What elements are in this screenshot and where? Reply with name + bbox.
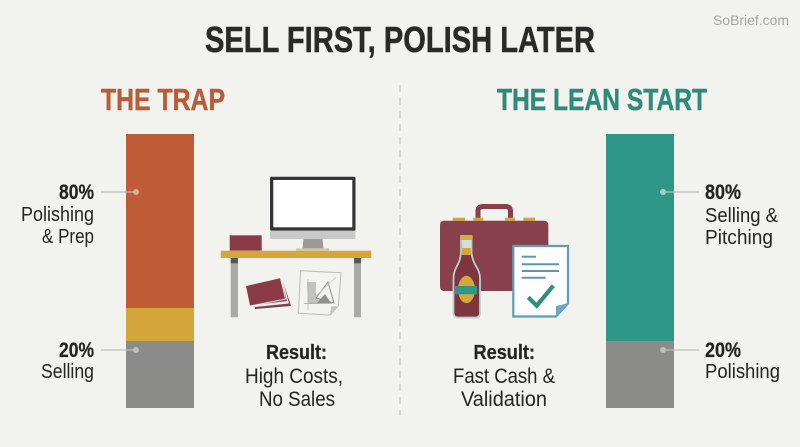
panel: the trap: [21, 82, 371, 411]
result: fast cash and validation: [453, 342, 555, 411]
watermark: SoBrief.com: [713, 12, 789, 28]
callout: 80% polishing and prep: & Prep: [42, 226, 94, 248]
callout: 80% selling and pitching: Selling &: [705, 205, 779, 227]
callout: 20% selling: [41, 339, 139, 383]
callout: 80% polishing and prep: [21, 181, 139, 248]
result: high costs, no sales: [245, 342, 343, 411]
callout: 80% polishing and prep: Polishing: [21, 204, 94, 226]
result: high costs, no sales: No Sales: [259, 388, 335, 411]
heading: the trap: THE TRAP: [101, 82, 225, 117]
heading: the lean start: THE LEAN START: [497, 82, 707, 117]
callout: 80% selling and pitching: Pitching: [705, 227, 773, 249]
result: high costs, no sales: High Costs,: [245, 365, 343, 388]
panel: the lean start: [440, 82, 780, 411]
result: fast cash and validation: Result:: [474, 342, 535, 364]
callout: 80% selling and pitching: [660, 181, 779, 249]
result: fast cash and validation: Validation: [461, 388, 547, 411]
callout: 20% selling: 20%: [59, 339, 94, 362]
stacked bar: lean time split: [606, 134, 674, 408]
callout: 20% selling: Selling: [41, 361, 94, 383]
callout: 20% polishing: 20%: [705, 339, 741, 362]
icon: desk with monitor and papers: [221, 177, 371, 317]
callout: 20% polishing: Polishing: [705, 361, 780, 383]
result: fast cash and validation: Fast Cash &: [453, 365, 555, 388]
callout: 80% selling and pitching: 80%: [705, 181, 741, 204]
result: high costs, no sales: Result:: [266, 342, 327, 364]
stacked bar: trap time split: [126, 134, 194, 408]
callout: 20% polishing: [660, 339, 780, 383]
callout: 80% polishing and prep: 80%: [59, 181, 94, 204]
icon: briefcase, bottle and checked document: [440, 206, 568, 318]
title: SELL FIRST, POLISH LATER: [205, 19, 595, 60]
